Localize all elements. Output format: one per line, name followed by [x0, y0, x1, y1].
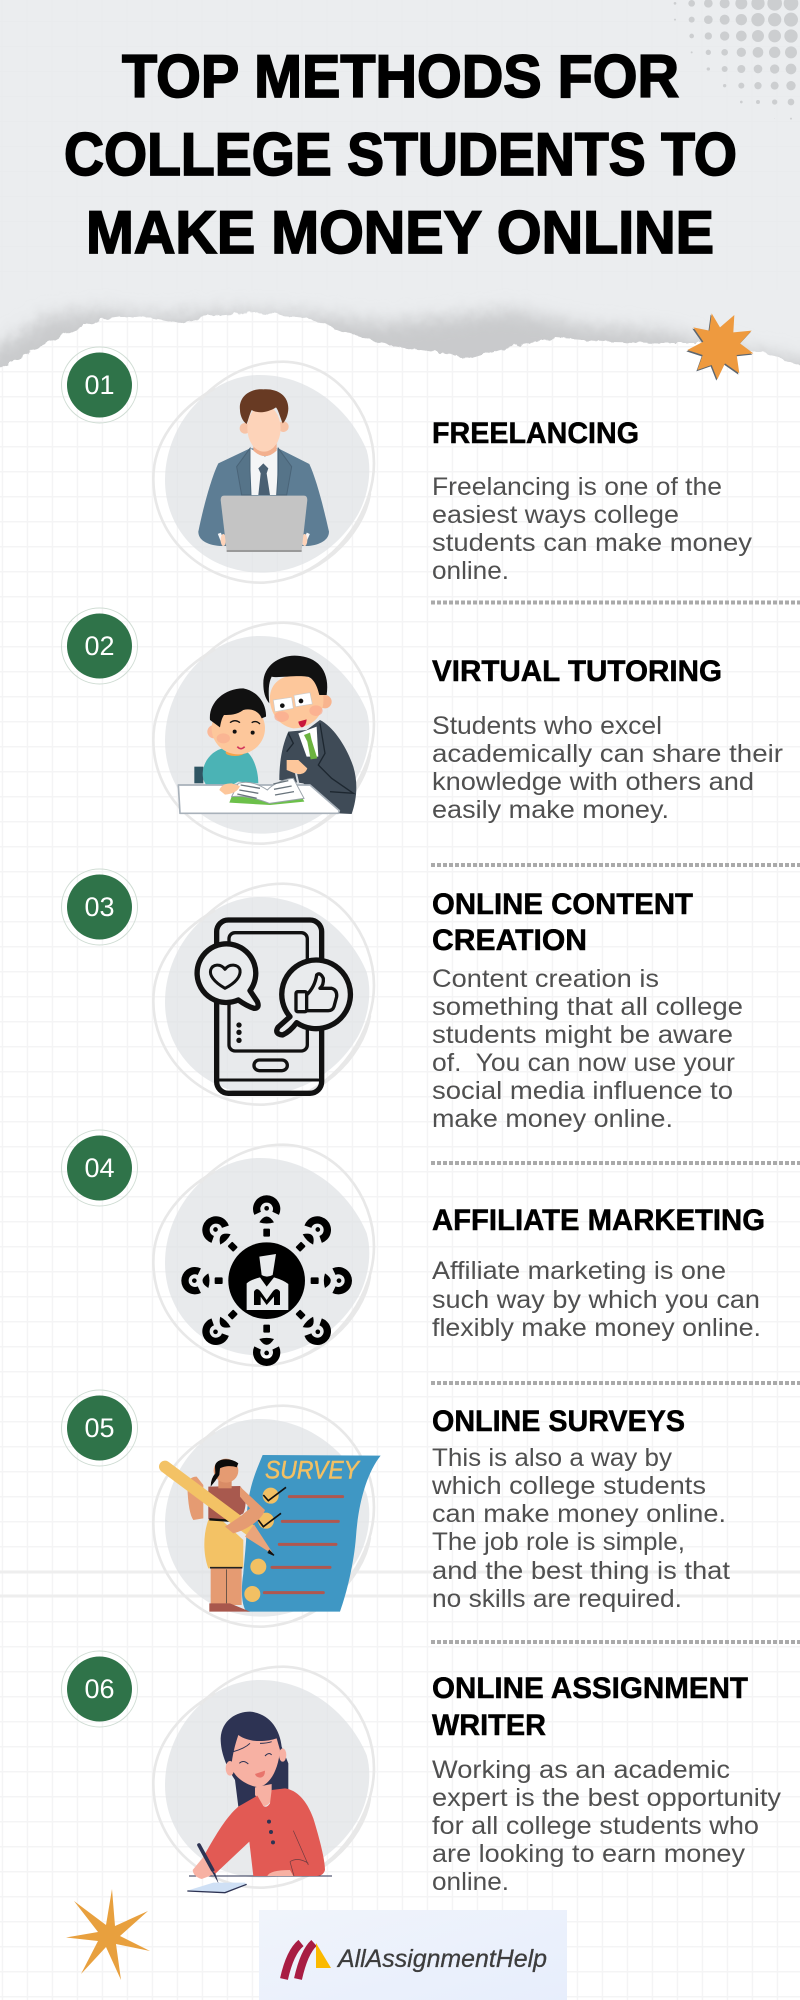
- illustration: man at laptop: [198, 389, 329, 552]
- illustration: survey and woman with pencil: [165, 1455, 381, 1612]
- heading: [432, 888, 693, 957]
- panel: 05 online surveys: [62, 1390, 730, 1627]
- description: [432, 965, 743, 1133]
- badge 05: [62, 1390, 138, 1466]
- title: TOP METHODS FOR: [122, 43, 679, 110]
- title: COLLEGE STUDENTS TO: [64, 121, 737, 188]
- illustration: teacher and student: [178, 656, 356, 814]
- description: make money online.: [432, 1105, 673, 1133]
- heading: ONLINE SURVEYS: [432, 1405, 685, 1438]
- badge 02: 02: [84, 631, 115, 661]
- description: social media influence to: [432, 1077, 733, 1105]
- heading: [432, 1672, 748, 1742]
- description: Content creation is: [432, 965, 659, 993]
- description: no skills are required.: [432, 1585, 682, 1613]
- panel: 01 freelancing: [62, 347, 753, 585]
- panel: 03 online content creation: [62, 869, 743, 1133]
- description: which college students: [431, 1472, 706, 1500]
- illustration: survey and woman with pencil: SURVEY: [265, 1457, 361, 1485]
- description: [431, 1444, 730, 1613]
- blob and ring: [153, 1145, 374, 1366]
- description: [432, 712, 783, 824]
- panel: 04 affiliate marketing: [62, 1130, 765, 1366]
- badge 06: [62, 1651, 138, 1727]
- description: of. You can now use your: [432, 1049, 735, 1077]
- blob and ring: [153, 623, 374, 844]
- badge 06: 06: [84, 1674, 115, 1704]
- title: MAKE MONEY ONLINE: [86, 199, 714, 266]
- badge 01: 01: [84, 370, 115, 400]
- description: expert is the best opportunity: [432, 1784, 782, 1812]
- description: easiest ways college: [432, 501, 679, 529]
- description: online.: [432, 557, 509, 585]
- description: [432, 473, 753, 585]
- description: students might be aware: [432, 1021, 733, 1049]
- badge 02: [62, 608, 138, 684]
- description: for all college students who: [432, 1812, 759, 1840]
- description: Working as an academic: [432, 1756, 730, 1784]
- icon: logo mark: [284, 1943, 331, 1979]
- description: something that all college: [432, 993, 743, 1021]
- description: Students who excel: [432, 712, 662, 740]
- badge 04: [62, 1130, 138, 1206]
- badge 03: 03: [84, 892, 115, 922]
- description: and the best thing is that: [432, 1557, 730, 1585]
- description: academically can share their: [432, 740, 783, 768]
- description: flexibly make money online.: [432, 1314, 761, 1342]
- description: online.: [432, 1868, 509, 1896]
- heading: ONLINE CONTENT: [432, 888, 693, 921]
- illustration: phone with reactions: [197, 920, 350, 1093]
- description: are looking to earn money: [432, 1840, 746, 1868]
- description: This is also a way by: [432, 1444, 673, 1472]
- halftone dots: [674, 0, 798, 120]
- footer logo panel: [259, 1910, 567, 2000]
- description: [432, 1756, 782, 1896]
- badge 01: [62, 347, 138, 423]
- heading: FREELANCING: [432, 417, 639, 450]
- description: students can make money: [432, 529, 753, 557]
- description: knowledge with others and: [432, 768, 754, 796]
- description: Affiliate marketing is one: [432, 1257, 726, 1285]
- badge 05: 05: [84, 1413, 115, 1443]
- blob and ring: [153, 362, 374, 583]
- blob and ring: [153, 1406, 374, 1627]
- illustration: woman writing: [187, 1712, 332, 1893]
- torn paper header: [0, 0, 800, 368]
- heading: VIRTUAL TUTORING: [432, 655, 722, 688]
- icon: orange star top right: [686, 313, 753, 381]
- blob and ring: [153, 1667, 374, 1888]
- icon: orange star bottom left: [66, 1889, 150, 1980]
- illustration: network of people: [185, 1199, 348, 1362]
- description: The job role is simple,: [432, 1528, 685, 1556]
- badge 03: [62, 869, 138, 945]
- panel: 06 online assignment writer: [62, 1651, 782, 1896]
- logo text: AllAssignmentHelp: [336, 1945, 547, 1973]
- heading: ONLINE ASSIGNMENT: [432, 1672, 748, 1705]
- badge 04: 04: [84, 1153, 115, 1183]
- heading: AFFILIATE MARKETING: [432, 1204, 765, 1237]
- title: [64, 43, 737, 266]
- description: can make money online.: [432, 1500, 726, 1528]
- description: [432, 1257, 761, 1342]
- panel: 02 virtual tutoring: [62, 608, 783, 844]
- description: easily make money.: [432, 796, 669, 824]
- heading: CREATION: [432, 924, 587, 957]
- heading: WRITER: [432, 1709, 546, 1742]
- description: Freelancing is one of the: [432, 473, 722, 501]
- description: such way by which you can: [432, 1286, 760, 1314]
- blob and ring: [153, 884, 374, 1105]
